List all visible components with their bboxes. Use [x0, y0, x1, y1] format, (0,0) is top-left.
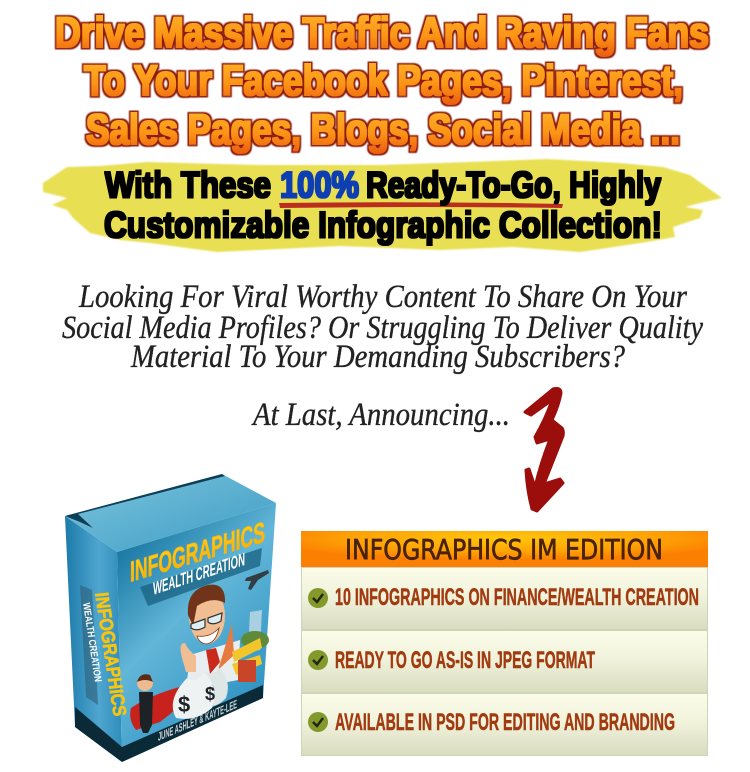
subheading text — [104, 164, 662, 246]
box top lid — [65, 474, 276, 552]
icon: check — [308, 712, 328, 732]
money bags — [173, 668, 228, 719]
yellow brush stroke — [43, 159, 722, 252]
handwritten question text: Material To Your Demanding Subscribers? — [130, 339, 625, 375]
box side face — [65, 516, 122, 762]
panel header: INFOGRAPHICS IM EDITION — [345, 533, 663, 566]
box title: INFOGRAPHICS — [130, 516, 265, 589]
row 1 — [302, 568, 708, 630]
highlighted subheading on yellow brush stroke — [43, 159, 722, 252]
red underline — [279, 202, 563, 208]
icon: check — [308, 650, 328, 670]
box subtitle — [140, 548, 262, 606]
money bags: $ — [205, 684, 215, 704]
main character — [181, 585, 240, 690]
small character — [137, 674, 153, 733]
gold house — [232, 631, 269, 682]
handwritten question text — [62, 279, 703, 375]
subheading text: 100% — [280, 164, 359, 206]
panel: Infographics IM Edition features — [301, 531, 708, 756]
subheading text: With These — [105, 164, 271, 206]
box side text: WEALTH CREATION — [80, 602, 103, 682]
icon: red squiggle arrow — [525, 388, 563, 511]
box side text: INFOGRAPHICS — [90, 591, 130, 717]
product box illustration: JUNE ASHLEY & KAYTE-LEE — [158, 697, 237, 744]
box subtitle: WEALTH CREATION — [153, 548, 245, 599]
box front face — [117, 503, 276, 762]
subheading text: Ready-To-Go, Highly — [366, 164, 661, 206]
icon: check — [308, 588, 328, 608]
buildings — [248, 610, 262, 652]
subheading text: Customizable Infographic Collection! — [104, 204, 662, 246]
product box illustration — [65, 474, 276, 762]
box side text — [80, 585, 130, 717]
row 3 — [302, 694, 708, 756]
title: main headline — [55, 9, 709, 154]
box base band — [75, 685, 263, 762]
announcing text: At Last, Announcing... — [251, 397, 510, 433]
money bags: $ — [178, 692, 190, 717]
red car — [130, 686, 188, 730]
plane — [245, 570, 269, 590]
row 2 — [302, 630, 708, 692]
